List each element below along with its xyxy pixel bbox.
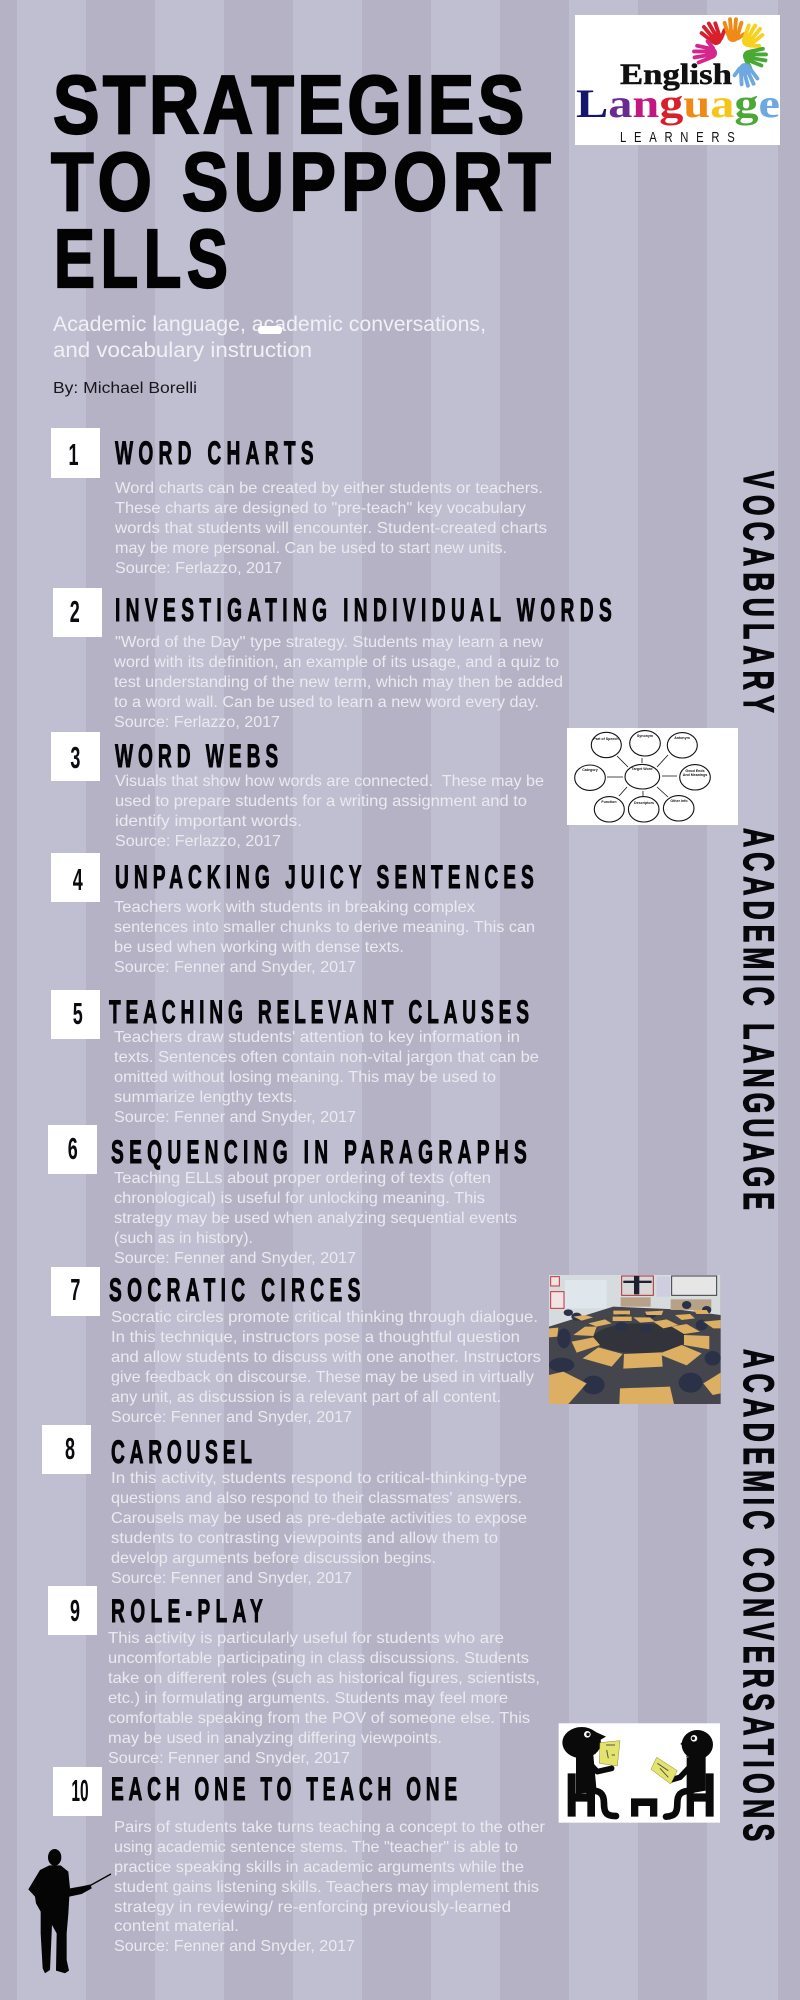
- panel: strategy 3 word webs: [51, 732, 544, 850]
- image: word web diagram: Descriptors: [634, 801, 654, 805]
- body 10: practice speaking skills in academic arguments while the: [114, 1859, 524, 1876]
- number badge 9: [48, 1586, 97, 1635]
- body 6: Source: Fenner and Snyder, 2017: [114, 1250, 356, 1267]
- body 9: Source: Fenner and Snyder, 2017: [108, 1750, 350, 1767]
- image: word web diagram: Function: [601, 800, 617, 804]
- body 8: Carousels may be used as pre-debate activities to expose: [111, 1510, 527, 1527]
- title: STRATEGIES: [53, 59, 524, 151]
- heading 4: UNPACKING JUICY SENTENCES: [115, 859, 534, 895]
- body 7: Socratic circles promote critical thinking through dialogue.: [111, 1309, 538, 1326]
- subtitle: Academic language, academic conversations,: [53, 312, 486, 336]
- body 9: [108, 1630, 540, 1767]
- body 10: Source: Fenner and Snyder, 2017: [114, 1938, 355, 1955]
- body 9: may be used in analyzing differing viewpoints.: [108, 1730, 442, 1747]
- body 5: summarize lengthy texts.: [114, 1089, 297, 1106]
- body 4: Source: Fenner and Snyder, 2017: [114, 959, 356, 976]
- body 1: may be more personal. Can be used to start new units.: [115, 540, 507, 557]
- number badge 9: 9: [70, 1594, 80, 1628]
- title: [51, 59, 551, 305]
- panel: strategy 7 socratic circles: [51, 1267, 541, 1426]
- body 10: Pairs of students take turns teaching a concept to the other: [114, 1819, 545, 1836]
- panel: strategy 10 each one to teach one: [53, 1767, 545, 1955]
- body 8: [111, 1470, 527, 1587]
- image: word web diagram: [567, 728, 738, 825]
- body 3: Source: Ferlazzo, 2017: [115, 833, 281, 850]
- number badge 7: [51, 1267, 100, 1316]
- panel: strategy 1 word charts: [51, 428, 547, 577]
- body 7: [111, 1309, 541, 1426]
- heading 7: SOCRATIC CIRCES: [109, 1272, 360, 1308]
- author: By: Michael Borelli: [53, 380, 197, 397]
- body 5: Source: Fenner and Snyder, 2017: [114, 1109, 356, 1126]
- body 1: Word charts can be created by either students or teachers.: [115, 480, 543, 497]
- panel: strategy 8 carousel: [42, 1425, 527, 1587]
- panel: strategy 9 role-play: [48, 1586, 540, 1767]
- body 4: be used when working with dense texts.: [114, 939, 404, 956]
- image: two students reading to each other: [559, 1723, 720, 1823]
- image: word web diagram: Target Word: [632, 767, 652, 771]
- body 7: and allow students to discuss with one another. Instructors: [111, 1349, 541, 1366]
- heading 5: TEACHING RELEVANT CLAUSES: [109, 994, 529, 1030]
- panel: strategy 5 teaching relevant clauses: [51, 990, 539, 1126]
- body 7: any unit, as discussion is a relevant part of all content.: [111, 1389, 501, 1406]
- number badge 1: [51, 428, 100, 478]
- body 6: strategy may be used when analyzing sequential events: [114, 1210, 517, 1227]
- body 7: Source: Fenner and Snyder, 2017: [111, 1409, 352, 1426]
- body 2: word with its definition, an example of its usage, and a quiz to: [113, 654, 559, 671]
- body 9: etc.) in formulating arguments. Students may feel more: [108, 1690, 508, 1707]
- heading 2: INVESTIGATING INDIVIDUAL WORDS: [115, 592, 612, 628]
- body 2: "Word of the Day" type strategy. Students may learn a new: [115, 634, 544, 651]
- body 3: Visuals that show how words are connected. These may be: [115, 773, 544, 790]
- body 1: Source: Ferlazzo, 2017: [115, 560, 282, 577]
- body 5: Teachers draw students' attention to key information in: [114, 1029, 520, 1046]
- body 2: [113, 634, 563, 731]
- body 10: strategy in reviewing/ re-enforcing previously-learned: [114, 1899, 511, 1916]
- subtitle: [53, 312, 486, 362]
- body 3: used to prepare students for a writing assignment and to: [115, 793, 527, 810]
- number badge 6: [48, 1125, 97, 1174]
- number badge 2: [53, 588, 102, 637]
- body 6: Teaching ELLs about proper ordering of texts (often: [114, 1170, 491, 1187]
- heading 6: SEQUENCING IN PARAGRAPHS: [111, 1134, 527, 1170]
- body 10: using academic sentence stems. The "teacher" is able to: [114, 1839, 518, 1856]
- number badge 7: 7: [70, 1273, 80, 1307]
- number badge 4: [51, 853, 100, 902]
- number badge 1: 1: [68, 438, 79, 472]
- body 6: [114, 1170, 517, 1267]
- number badge 5: 5: [73, 997, 83, 1031]
- image: classroom with desks in a circle: [549, 1275, 721, 1404]
- panel: strategy 4 unpacking juicy sentences: [51, 853, 535, 976]
- heading 9: ROLE-PLAY: [111, 1593, 263, 1629]
- body 6: (such as in history).: [114, 1230, 253, 1247]
- image: word web diagram: Category: [582, 768, 598, 772]
- body 8: develop arguments before discussion begins.: [111, 1550, 436, 1567]
- body 7: give feedback on discourse. These may be used in virtually: [111, 1369, 534, 1386]
- body 9: take on different roles (such as historical figures, scientists,: [108, 1670, 540, 1687]
- body 9: comfortable speaking from the POV of someone else. This: [108, 1710, 530, 1727]
- body 2: to a word wall. Can be used to learn a new word every day.: [114, 694, 539, 711]
- body 3: identify important words.: [115, 813, 302, 830]
- image: word web diagram: Antonym: [674, 736, 690, 740]
- body 8: In this activity, students respond to critical-thinking-type: [111, 1470, 527, 1487]
- number badge 10: 10: [71, 1774, 89, 1809]
- logo word: Learners: LEARNERS: [620, 128, 735, 145]
- body 4: [114, 899, 535, 976]
- logo word: Language: Language: [576, 81, 780, 126]
- body 1: words that students will encounter. Student-created charts: [114, 520, 547, 537]
- heading 8: CAROUSEL: [111, 1434, 252, 1470]
- body 1: [114, 480, 547, 577]
- title: ELLS: [54, 213, 228, 305]
- side label: academic conversations: ACADEMIC CONVERSATIONS: [734, 1349, 782, 1841]
- image: word web diagram: Synonym: [637, 734, 653, 738]
- body 5: texts. Sentences often contain non-vital jargon that can be: [114, 1049, 539, 1066]
- body 4: sentences into smaller chunks to derive meaning. This can: [114, 919, 535, 936]
- number badge 3: [51, 732, 100, 781]
- image: word web diagram: Other Info: [670, 799, 688, 803]
- image: word web diagram: Part of Speech: [593, 737, 619, 741]
- body 2: test understanding of the new term, which may then be added: [114, 674, 563, 691]
- body 9: This activity is particularly useful for students who are: [108, 1630, 504, 1647]
- side label: vocabulary: VOCABULARY: [734, 471, 782, 713]
- body 2: Source: Ferlazzo, 2017: [114, 714, 280, 731]
- body 8: Source: Fenner and Snyder, 2017: [111, 1570, 352, 1587]
- body 5: [114, 1029, 539, 1126]
- body 7: In this technique, instructors pose a thoughtful question: [111, 1329, 520, 1346]
- number badge 4: 4: [73, 863, 83, 897]
- title: TO SUPPORT: [51, 136, 551, 228]
- heading 3: WORD WEBS: [115, 738, 278, 774]
- icon: coloured hands: [693, 18, 767, 89]
- icon: teacher silhouette with pointer: [28, 1849, 111, 1973]
- body 5: omitted without losing meaning. This may be used to: [114, 1069, 496, 1086]
- logo word: English: English: [620, 58, 732, 91]
- panel: strategy 6 sequencing in paragraphs: [48, 1125, 527, 1267]
- body 8: questions and also respond to their classmates' answers.: [111, 1490, 522, 1507]
- number badge 6: 6: [68, 1132, 78, 1166]
- image: word web diagram: And Meanings: [683, 773, 707, 777]
- heading 10: EACH ONE TO TEACH ONE: [111, 1771, 457, 1807]
- number badge 10: [53, 1767, 102, 1816]
- white dash mark: [258, 326, 282, 334]
- body 6: chronological) is useful for unlocking meaning. This: [114, 1190, 485, 1207]
- heading 1: WORD CHARTS: [115, 435, 314, 471]
- body 1: These charts are designed to "pre-teach" key vocabulary: [115, 500, 526, 517]
- number badge 5: [51, 990, 100, 1039]
- body 10: [114, 1819, 545, 1955]
- image: word web diagram: Good Ends: [685, 769, 705, 773]
- panel: strategy 2 investigating individual words: [53, 588, 612, 731]
- body 4: Teachers work with students in breaking complex: [114, 899, 475, 916]
- number badge 8: 8: [65, 1432, 75, 1466]
- number badge 8: [42, 1425, 91, 1474]
- number badge 2: 2: [70, 595, 80, 629]
- logo: English Language Learners: [575, 15, 780, 145]
- number badge 3: 3: [70, 741, 80, 775]
- body 3: [115, 773, 544, 850]
- body 10: content material.: [114, 1918, 239, 1935]
- side label: academic language: ACADEMIC LANGUAGE: [734, 828, 782, 1210]
- body 8: students to contrasting viewpoints and allow them to: [111, 1530, 498, 1547]
- body 10: student gains listening skills. Teachers may implement this: [114, 1879, 539, 1896]
- subtitle: and vocabulary instruction: [53, 338, 312, 362]
- body 9: uncomfortable participating in class discussions. Students: [108, 1650, 529, 1667]
